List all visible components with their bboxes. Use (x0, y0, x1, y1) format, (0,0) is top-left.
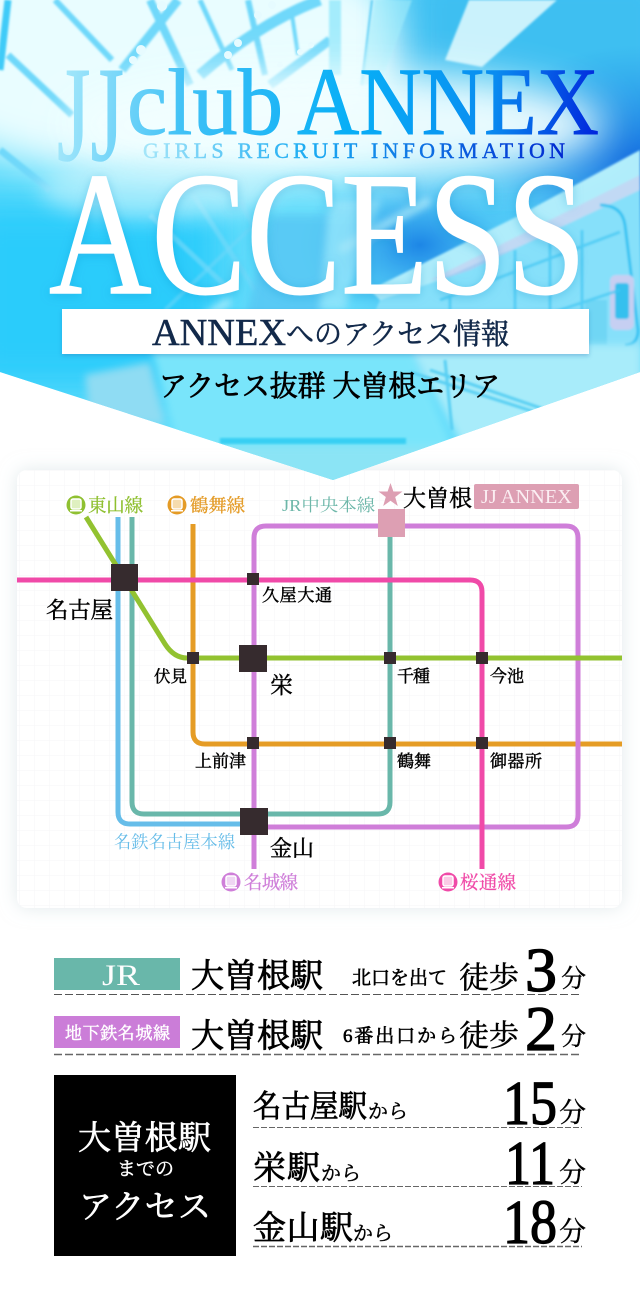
station: Tsurumai: 鶴舞 (397, 752, 431, 771)
label: Higashiyama line (66, 496, 143, 517)
panel: route map (17, 470, 622, 908)
station: Ozone: 大曽根 (403, 486, 472, 511)
row: from Sakae station: 栄駅 (253, 1151, 320, 1187)
panel: access to Ozone station: 大曽根駅 (78, 1120, 211, 1157)
label: Sakura-dori line: 桜通線 (460, 873, 516, 894)
line: Meijo line (254, 526, 578, 869)
row: from Kanayama station: 分 (559, 1217, 586, 1247)
label: Meijo line: 名城線 (244, 873, 298, 894)
badge: JJ ANNEX: JJ ANNEX (481, 486, 573, 508)
station: Hisaya-odori (247, 573, 332, 605)
station: Hisaya-odori: 久屋大通 (262, 586, 332, 605)
logo: JJ club ANNEX: JJ (57, 40, 124, 190)
label: Tsurumai line (168, 496, 245, 517)
row: from Nagoya station: 名古屋駅 (253, 1089, 367, 1124)
label: Sakura-dori line (438, 872, 516, 894)
station: Sakae (239, 645, 293, 698)
station floor (85, 345, 640, 490)
heading bar: ANNEX (152, 312, 286, 354)
station: Gokiso: 御器所 (490, 752, 542, 771)
tagline: アクセス抜群 大曽根エリア (159, 369, 500, 403)
label: JR Chuo main line: JR中央本線 (282, 496, 375, 515)
station: Sakae: 栄 (270, 673, 293, 698)
panel: access to Ozone station (54, 1075, 236, 1256)
row: from Kanayama station: 金山駅 (253, 1210, 353, 1247)
station: Tsurumai (384, 737, 431, 771)
subtitle: GIRLS RECRUIT INFORMATION: GIRLS RECRUIT INFORMATION (143, 138, 565, 163)
station: Ozone (378, 483, 472, 537)
station: Chikusa (384, 652, 430, 686)
row: Meijo subway Ozone station walk: 地下鉄名城線 (65, 1024, 170, 1043)
panel: access to Ozone station: までの (117, 1159, 174, 1180)
hero banner with station photo background (0, 0, 640, 490)
logo: JJ club ANNEX (57, 40, 599, 190)
row: from Kanayama station: から (353, 1223, 393, 1245)
row: JR Ozone station walk: JR (102, 959, 140, 992)
white glow behind logo (65, 70, 605, 180)
row: Meijo subway Ozone station walk: 2 (525, 993, 557, 1064)
logo: JJ club ANNEX: club (127, 51, 283, 155)
station: Imaike (476, 652, 524, 686)
line: Tsurumai line (193, 524, 622, 744)
station: Fushimi: 伏見 (154, 667, 187, 686)
line: Meitetsu Nagoya main line (118, 517, 254, 824)
row: from Sakae station (253, 1130, 586, 1198)
station: Kanayama: 金山 (270, 836, 314, 861)
train carriage (350, 150, 640, 390)
row: from Nagoya station: 分 (559, 1098, 586, 1128)
heading bar (62, 309, 589, 354)
station: Kamimaezu (195, 737, 259, 771)
station: Imaike: 今池 (490, 666, 524, 686)
row: from Nagoya station: から (368, 1101, 408, 1123)
row: JR Ozone station walk: 徒歩 (459, 962, 519, 995)
row: from Nagoya station: 15 (503, 1070, 557, 1138)
row: from Kanayama station: 18 (503, 1189, 557, 1257)
row: JR Ozone station walk: 大曽根駅 (191, 958, 323, 995)
label: Meitetsu Nagoya main line: 名鉄名古屋本線 (114, 832, 235, 852)
perforated ceiling panel (202, 194, 434, 309)
station: Chikusa: 千種 (397, 667, 430, 686)
line: JR Chuo main line (132, 510, 390, 814)
row: from Kanayama station (253, 1189, 586, 1257)
row: JR Ozone station walk: 北口を出て (352, 967, 447, 989)
row: Meijo subway Ozone station walk: 6番出口から (343, 1025, 457, 1047)
label: Meijo line (222, 872, 298, 894)
row: Meijo subway Ozone station walk: 分 (561, 1023, 586, 1051)
row: Meijo subway Ozone station walk: 大曽根駅 (191, 1018, 323, 1055)
row: Meijo subway Ozone station walk: 徒歩 (459, 1020, 519, 1053)
station: Kanayama (240, 808, 314, 861)
logo: JJ club ANNEX: ANNEX (297, 48, 599, 155)
row: JR Ozone station walk (54, 937, 586, 1005)
line: Higashiyama line (86, 517, 622, 658)
station: Nagoya (46, 564, 138, 623)
row: Meijo subway Ozone station walk (54, 993, 586, 1064)
station: Fushimi (154, 652, 199, 686)
panel: access to Ozone station: アクセス (79, 1190, 211, 1226)
label: Tsurumai line: 鶴舞線 (190, 496, 245, 517)
row: JR Ozone station walk: 3 (525, 937, 557, 1005)
heading bar: へのアクセス情報 (286, 318, 509, 351)
label: Higashiyama line: 東山線 (88, 496, 143, 517)
row: from Sakae station: から (321, 1163, 361, 1185)
station: Nagoya: 名古屋 (46, 598, 113, 623)
row: from Nagoya station (253, 1070, 586, 1138)
station: Gokiso (476, 737, 542, 771)
line: Sakura-dori line (17, 580, 482, 869)
row: JR Ozone station walk: 分 (561, 965, 586, 993)
row: from Sakae station: 11 (505, 1130, 555, 1198)
row: from Sakae station: 分 (559, 1158, 586, 1188)
station: Kamimaezu: 上前津 (195, 752, 246, 771)
